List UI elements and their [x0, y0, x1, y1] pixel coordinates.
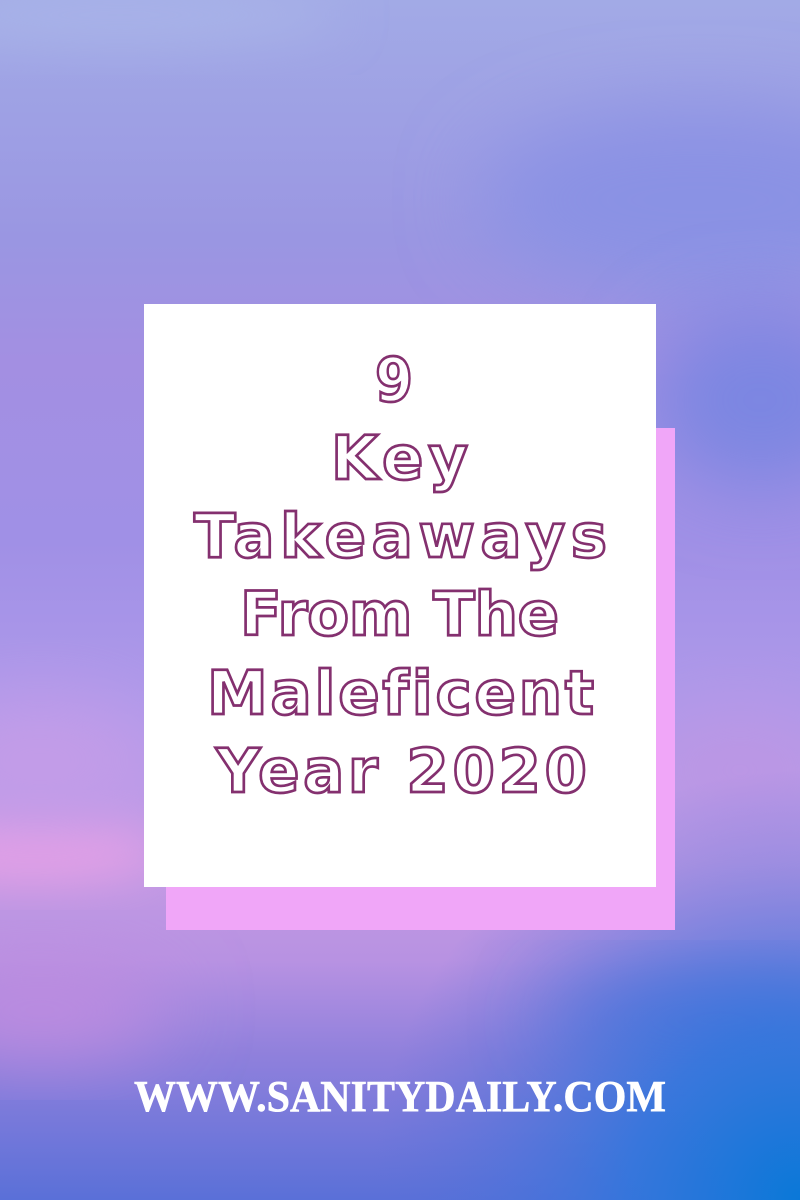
title: Takeaways [194, 501, 607, 572]
title: 9 [375, 345, 413, 416]
title [194, 345, 607, 807]
title: Key [331, 423, 468, 494]
title: Year 2020 [215, 736, 587, 807]
website url: WWW.SANITYDAILY.COM [134, 1072, 666, 1121]
title: From The [240, 579, 559, 650]
white title panel [144, 304, 656, 887]
shadow panel [166, 428, 675, 930]
title: Maleficent [207, 658, 594, 729]
